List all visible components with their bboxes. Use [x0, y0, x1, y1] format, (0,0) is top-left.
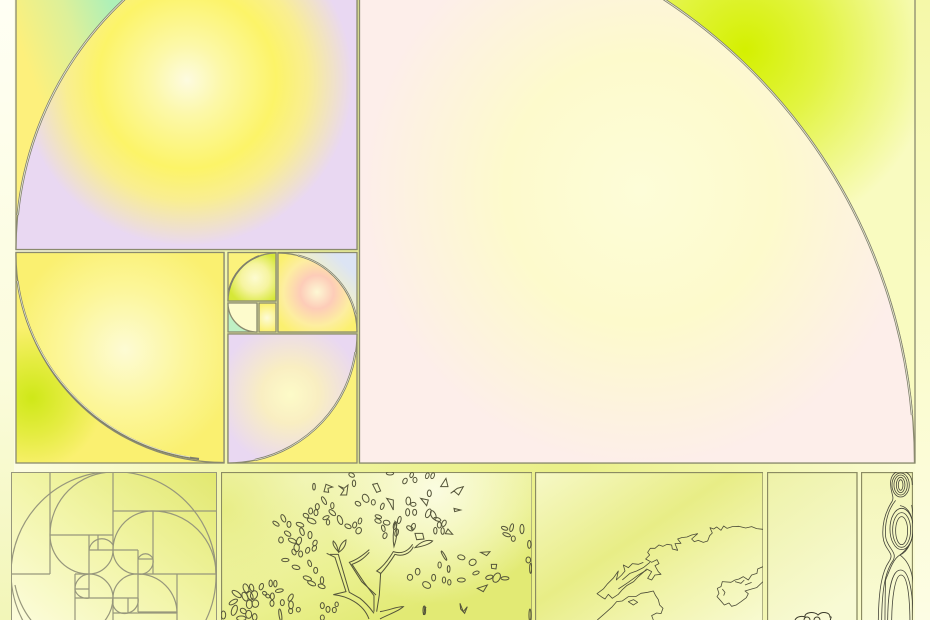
- panel: contour line panel: [862, 471, 915, 620]
- map coastlines: [597, 526, 763, 620]
- panel: Fibonacci circle diagram: [11, 472, 216, 620]
- panel: golden spiral composition: [16, 0, 915, 463]
- square: large pink square with quarter circle: [360, 0, 915, 463]
- square: tiny pale square with quarter circle: [228, 303, 257, 332]
- tree leaves: [221, 472, 532, 620]
- square: lavender top-left square with quarter circle: [16, 0, 357, 250]
- square: lime small square with quarter circle: [228, 252, 276, 301]
- tree trunk and branches: [327, 522, 433, 619]
- square: tiny yellow rectangle: [259, 303, 276, 332]
- panel: empty pale panel with small cloud figure: [768, 472, 857, 620]
- contour lines: [878, 471, 915, 620]
- square: pink-centred small square with quarter circle: [278, 252, 357, 332]
- square: yellow lower-left square with quarter circle: [16, 252, 224, 463]
- square: lower-right lavender square with quarter circle: [228, 334, 357, 463]
- panel: tree outline drawing: [221, 472, 532, 620]
- icon: cloud figure: [795, 613, 831, 620]
- panel: coastline map outline: [536, 472, 763, 620]
